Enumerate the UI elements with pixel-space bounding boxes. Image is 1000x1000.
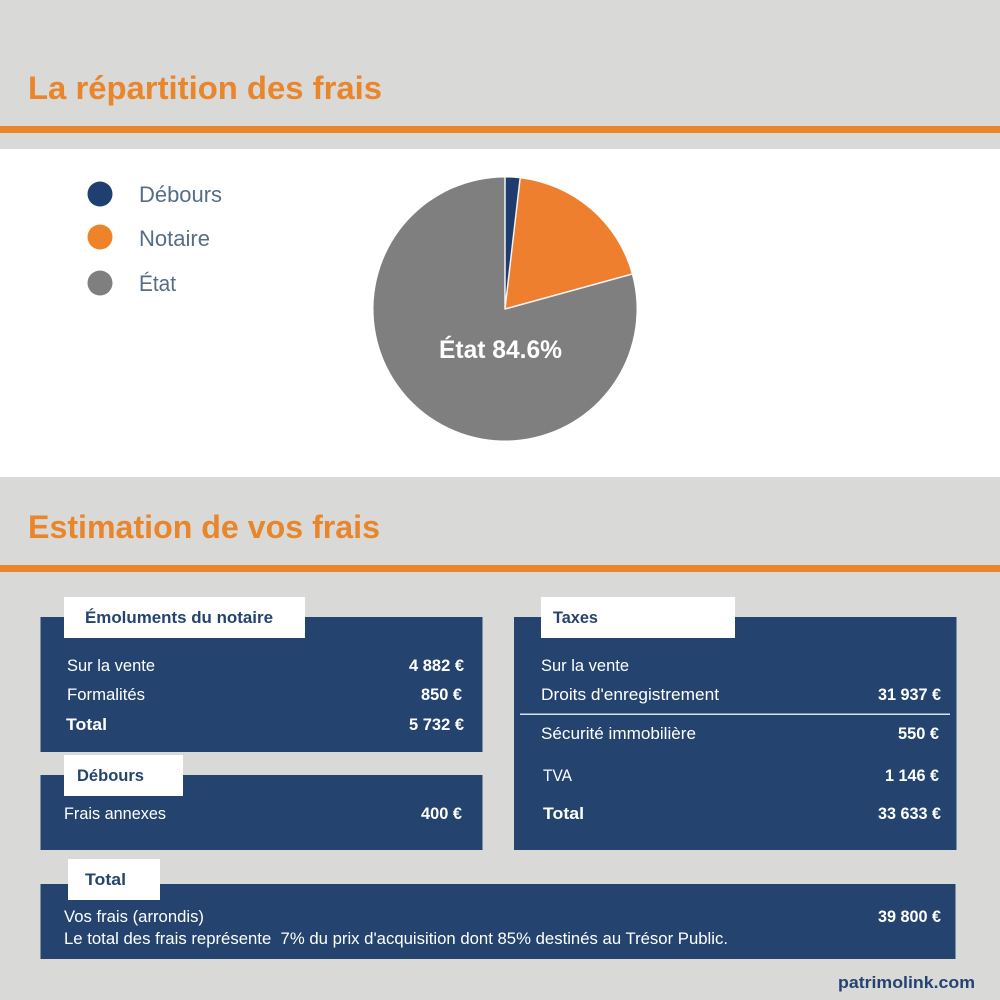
panel: émoluments du notaire: 850 € bbox=[421, 686, 462, 704]
panel: émoluments du notaire bbox=[40, 597, 482, 752]
pie chart bbox=[374, 178, 637, 440]
panel: émoluments du notaire: Total bbox=[66, 716, 107, 734]
legend: Débours bbox=[139, 182, 222, 207]
panel: émoluments du notaire: 4 882 € bbox=[409, 657, 464, 675]
panel: débours: Débours bbox=[77, 767, 144, 785]
panel: taxes: Droits d'enregistrement bbox=[541, 686, 719, 704]
panel: débours: Frais annexes bbox=[64, 805, 166, 823]
panel: taxes: 1 146 € bbox=[885, 767, 939, 785]
panel: taxes: 31 937 € bbox=[878, 686, 941, 704]
legend: Notaire bbox=[139, 226, 210, 251]
panel: taxes: Sécurité immobilière bbox=[541, 725, 696, 743]
panel: taxes: TVA bbox=[543, 767, 572, 785]
panel: total: Total bbox=[85, 871, 126, 889]
panel: taxes: Total bbox=[543, 805, 584, 823]
heading: Estimation de vos frais bbox=[0, 509, 1000, 572]
panel: total: Le total des frais représente 7% du prix d'acquisition dont 85% destinés au Trésor Public. bbox=[64, 930, 728, 948]
panel: débours bbox=[40, 755, 482, 850]
heading: La répartition des frais: La répartition des frais bbox=[28, 70, 382, 106]
legend: État bbox=[139, 271, 177, 296]
panel: taxes: 33 633 € bbox=[878, 805, 941, 823]
panel: total: 39 800 € bbox=[878, 908, 941, 926]
panel: émoluments du notaire: Formalités bbox=[67, 686, 145, 704]
heading: Estimation de vos frais: Estimation de vos frais bbox=[28, 509, 380, 545]
panel: taxes bbox=[514, 597, 956, 850]
panel: émoluments du notaire: Sur la vente bbox=[67, 657, 155, 675]
legend bbox=[88, 182, 222, 296]
panel: total: Vos frais (arrondis) bbox=[64, 908, 204, 926]
pie chart: État 84.6% bbox=[439, 335, 562, 364]
panel: taxes: Taxes bbox=[553, 609, 598, 627]
panel: répartition bbox=[0, 149, 1000, 477]
panel: émoluments du notaire: 5 732 € bbox=[409, 716, 464, 734]
panel: total bbox=[40, 859, 956, 959]
heading: La répartition des frais bbox=[0, 70, 1000, 133]
panel: débours: 400 € bbox=[421, 805, 462, 823]
footer: patrimolink.com: patrimolink.com bbox=[838, 974, 975, 992]
panel: taxes: Sur la vente bbox=[541, 657, 629, 675]
panel: taxes: 550 € bbox=[898, 725, 939, 743]
panel: émoluments du notaire: Émoluments du notaire bbox=[85, 608, 273, 627]
